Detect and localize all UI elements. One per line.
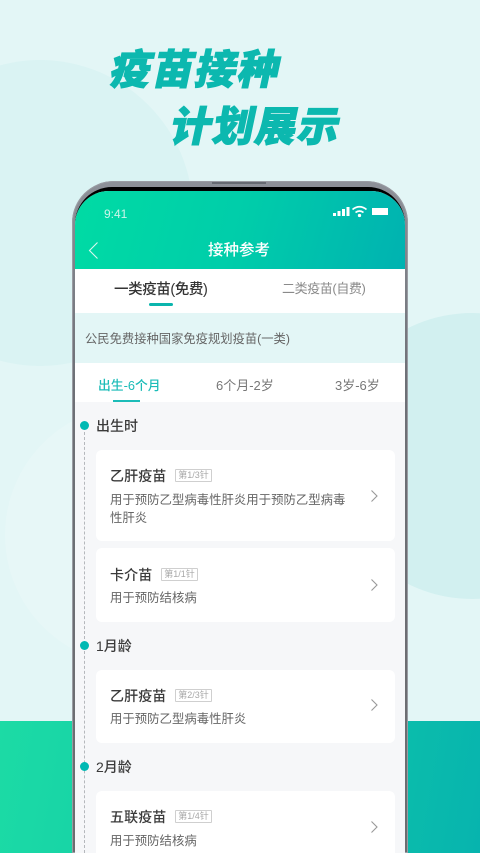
background circle: lower left [5, 405, 265, 665]
section label: birth: 出生时 [96, 418, 138, 434]
vaccine name: 乙肝疫苗 [110, 468, 166, 484]
timeline dashed line [84, 432, 85, 853]
battery [372, 208, 388, 215]
dose badge [175, 689, 212, 702]
card: pentavalent vaccine [96, 791, 395, 853]
vaccine name: 乙肝疫苗 [110, 688, 166, 704]
phone bezel [75, 187, 405, 853]
timeline dot: 2 months [80, 762, 89, 771]
timeline dot: birth [80, 421, 89, 430]
background circle: top left [0, 60, 193, 366]
dose badge: 第2/3针 [178, 690, 209, 700]
app header [75, 191, 405, 269]
dose badge: 第1/1针 [164, 569, 195, 579]
age tab indicator [113, 400, 140, 402]
phone speaker slit [212, 182, 266, 184]
vaccine description: 用于预防结核病 [110, 834, 197, 848]
age tab active: 出生-6个月 [98, 378, 161, 393]
title line 2: 计划展示 [166, 104, 346, 150]
schedule background [75, 402, 405, 853]
tab: second category: 二类疫苗(自费) [282, 281, 365, 296]
dose badge [161, 568, 198, 581]
vaccine name: 卡介苗 [110, 567, 152, 583]
vaccine description: 用于预防乙型病毒性肝炎用于预防乙型病毒 [110, 493, 345, 507]
status icons [333, 206, 388, 218]
chevron [371, 579, 378, 591]
vaccine description continued: 性肝炎 [110, 511, 147, 525]
vaccine description: 用于预防结核病 [110, 591, 197, 605]
phone frame [72, 181, 408, 853]
signal bars [333, 207, 350, 216]
info text: 公民免费接种国家免疫规划疫苗(一类) [85, 332, 290, 346]
card: hepatitis B dose 2 [96, 670, 395, 743]
nav title: 接种参考 [208, 242, 270, 259]
dose badge [175, 469, 212, 482]
back arrow [88, 242, 98, 259]
tab indicator [149, 303, 173, 306]
vaccine description: 用于预防乙型病毒性肝炎 [110, 712, 246, 726]
card: hepatitis B dose 1 [96, 450, 395, 541]
tab active: first category: 一类疫苗(免费) [114, 282, 207, 298]
info band [75, 313, 405, 363]
wifi icon [352, 207, 366, 216]
dose badge [175, 810, 212, 823]
dose badge: 第1/3针 [178, 470, 209, 480]
bottom colour band [0, 721, 480, 853]
title line 1: 疫苗接种 [106, 47, 286, 93]
section label: 1 month: 1月龄 [96, 638, 132, 654]
section label: 2 months: 2月龄 [96, 759, 132, 775]
card: BCG [96, 548, 395, 622]
timeline dot: 1 month [80, 641, 89, 650]
age tab: 6 months to 2 years: 6个月-2岁 [216, 378, 274, 393]
dose badge: 第1/4针 [178, 811, 209, 821]
background circle: right [329, 313, 480, 599]
phone screen [75, 191, 405, 853]
chevron [371, 490, 378, 502]
vaccine name: 五联疫苗 [110, 809, 166, 825]
age tab: 3 to 6 years: 3岁-6岁 [335, 378, 380, 393]
chevron [371, 821, 378, 833]
chevron [371, 699, 378, 711]
status time: 9:41 [104, 207, 127, 221]
